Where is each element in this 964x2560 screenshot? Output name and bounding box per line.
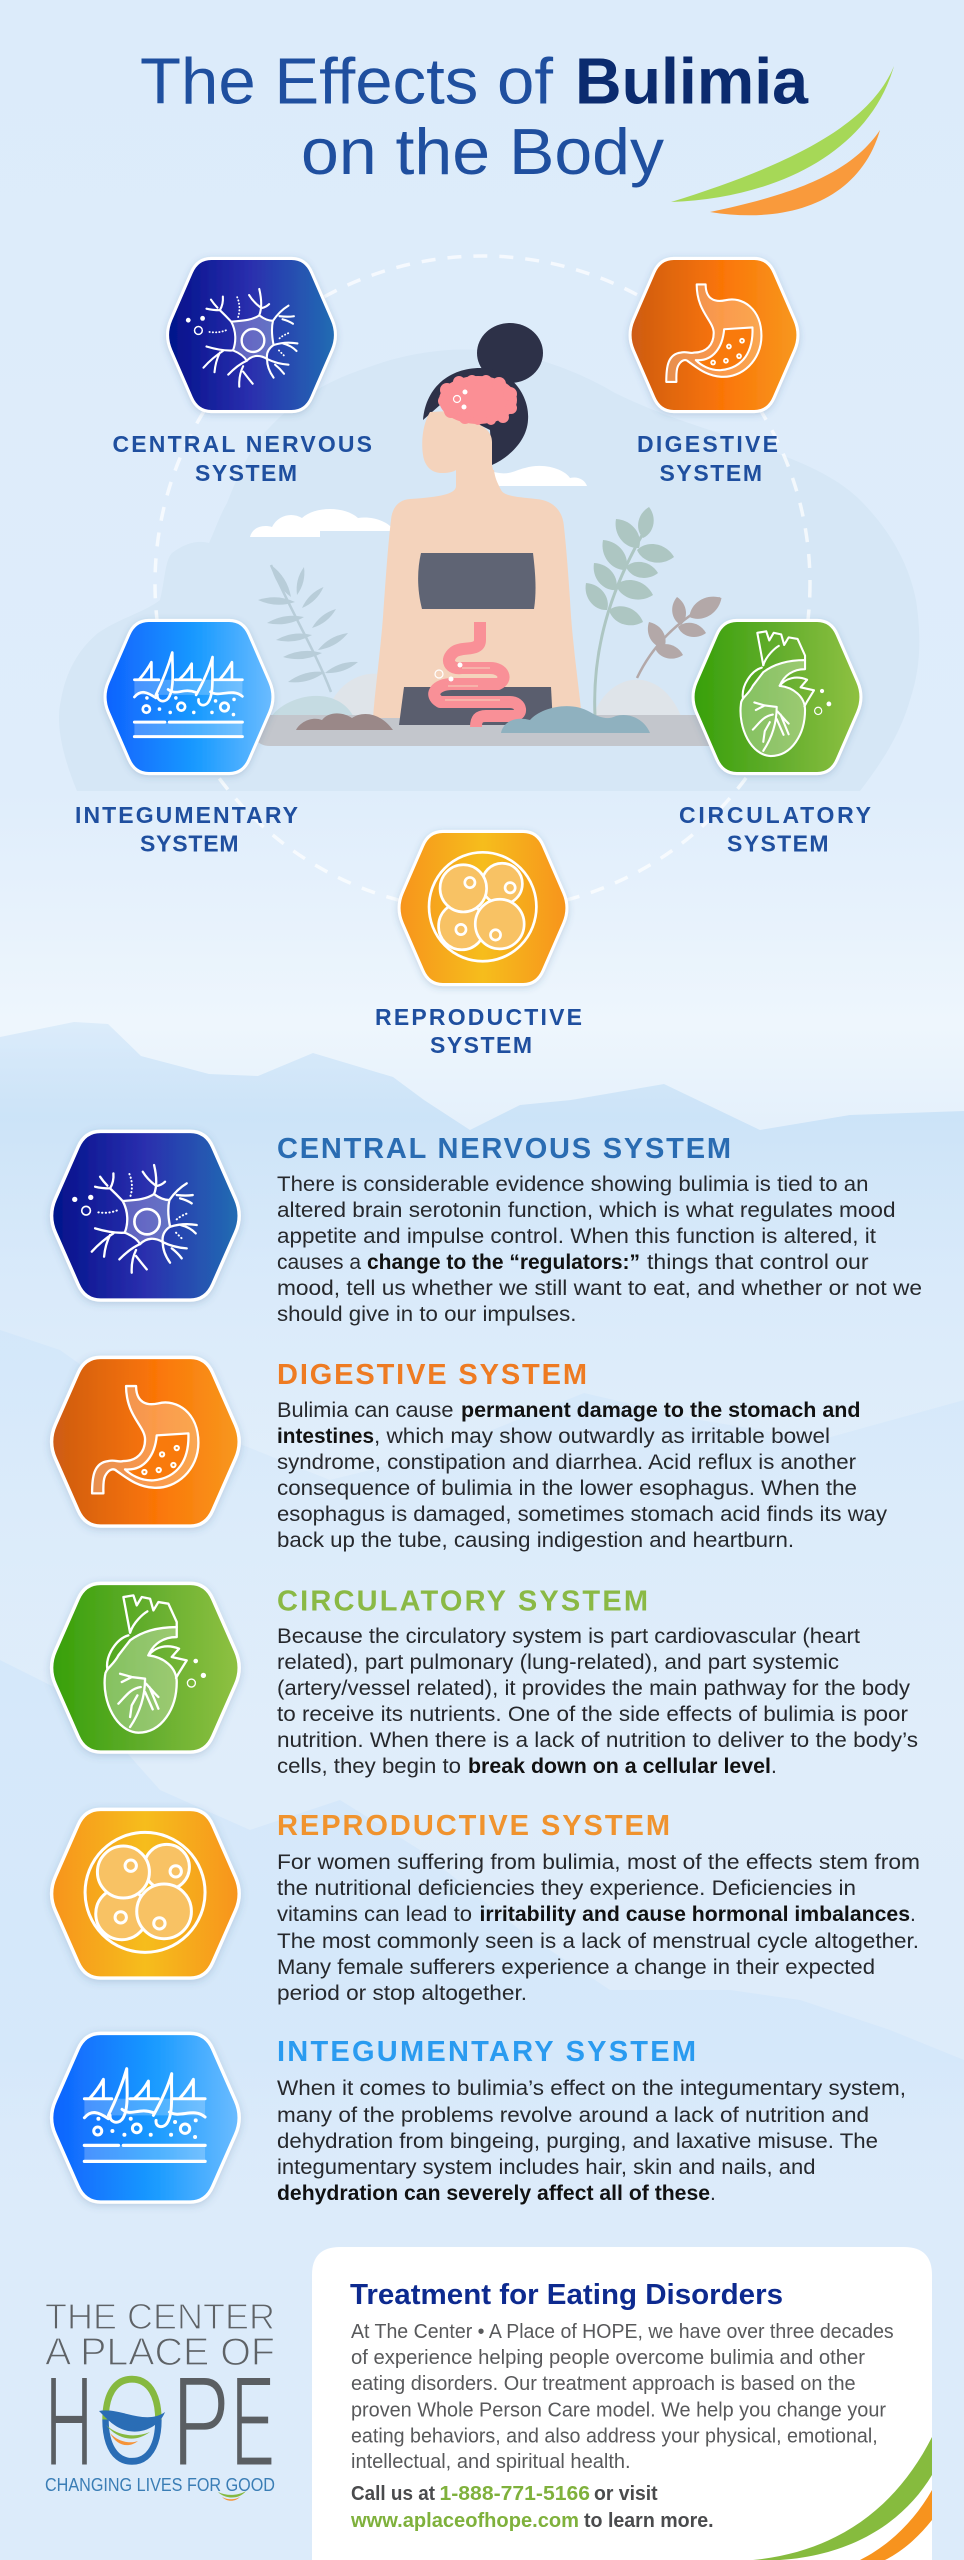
body text: . (710, 2182, 716, 2205)
panel: treatment card (312, 2247, 932, 2560)
panel: reproductive system (52, 1809, 920, 2005)
label: digestive system: DIGESTIVE (637, 431, 778, 457)
heading: CIRCULATORY SYSTEM (277, 1586, 648, 1618)
body text: things that control our (647, 1251, 869, 1274)
icon: digestive hexagon (630, 258, 798, 412)
heading: CENTRAL NERVOUS SYSTEM (277, 1133, 731, 1165)
call to action: www.aplaceofhope.com (350, 2509, 579, 2532)
body text: vitamins can lead to (277, 1903, 472, 1926)
brain (438, 375, 517, 425)
body text: altered brain serotonin function, which is what regulates mood (277, 1199, 896, 1222)
body text: the nutritional deficiencies they experience. Deficiencies in (277, 1877, 856, 1900)
logo: The Center A Place of Hope (45, 2296, 275, 2501)
body text: When it comes to bulimia’s effect on the integumentary system, (277, 2077, 906, 2100)
background hill (59, 350, 919, 791)
body text: cells, they begin to (277, 1755, 461, 1778)
body text: to receive its nutrients. One of the side effects of bulimia is poor (277, 1703, 908, 1726)
body text: should give in to our impulses. (277, 1303, 576, 1326)
hair (423, 368, 528, 465)
body (373, 462, 582, 718)
call to action: Call us at (351, 2482, 435, 2505)
body text: related), part pulmonary (lung-related), and part systemic (277, 1651, 839, 1674)
body text: syndrome, constipation and diarrhea. Acid reflux is another (277, 1451, 856, 1474)
label: integumentary system: SYSTEM (140, 830, 238, 856)
icon: circulatory hexagon (693, 620, 861, 774)
intestines (434, 622, 520, 727)
body text: period or stop altogether. (277, 1982, 527, 2005)
icon: pale left plant (258, 563, 359, 692)
body text: Bulimia can cause (277, 1399, 454, 1422)
icon: heart (52, 1583, 239, 1752)
call to action: or visit (594, 2482, 658, 2505)
heading: INTEGUMENTARY SYSTEM (277, 2036, 696, 2068)
icon: skin (52, 2033, 239, 2202)
icon: green right plant (580, 506, 676, 716)
dashed connection ring (155, 256, 810, 911)
body text: appetite and impulse control. When this function is altered, it (277, 1225, 876, 1248)
card body: of experience helping people overcome bulimia and other (351, 2346, 865, 2369)
logo: The Center A Place of Hope: P (172, 2348, 230, 2494)
body text: mood, tell us whether we still want to eat, and whether or not we (277, 1277, 922, 1300)
foreground rocks (296, 706, 650, 733)
body text: (artery/vessel related), it provides the main pathway for the body (277, 1677, 911, 1700)
card body (351, 2320, 894, 2473)
call to action: to learn more. (584, 2509, 714, 2532)
body text: There is considerable evidence showing bulimia is tied to an (277, 1173, 868, 1196)
body text: dehydration can severely affect all of these (277, 2182, 710, 2205)
body text (277, 2077, 906, 2205)
panel: central nervous system (52, 1131, 922, 1326)
icon: neuron (52, 1131, 239, 1300)
logo: The Center A Place of Hope: THE CENTER (45, 2296, 275, 2337)
panel: circulatory system (52, 1583, 918, 1778)
background mountains (0, 1022, 964, 2230)
panel: integumentary system (52, 2033, 906, 2205)
body text: back up the tube, causing indigestion and heartburn. (277, 1529, 794, 1552)
illustration: background rocks (268, 674, 681, 722)
body text: consequence of bulimia in the lower esophagus. When the (277, 1477, 857, 1500)
title: The Effects of (140, 44, 554, 118)
body text: For women suffering from bulimia, most of the effects stem from (277, 1851, 920, 1874)
card body: proven Whole Person Care model. We help you change your (351, 2398, 886, 2422)
logo: The Center A Place of Hope: H (45, 2348, 93, 2494)
body text: change to the “regulators:” (367, 1251, 640, 1274)
body text: dehydration from bingeing, purging, and laxative misuse. The (277, 2130, 878, 2153)
label: central nervous system (112, 431, 372, 486)
call to action (350, 2482, 714, 2532)
face (422, 410, 501, 490)
icon: cells (52, 1809, 239, 1978)
clouds (250, 466, 587, 537)
body text: . (771, 1755, 777, 1778)
body text: causes a (277, 1251, 361, 1274)
icon: stomach (52, 1357, 239, 1526)
label: circulatory system (679, 802, 871, 856)
body text (277, 1173, 922, 1326)
body text: , which may show outwardly as irritable bowel (374, 1425, 830, 1448)
title swoosh (671, 66, 894, 215)
body text (277, 1399, 888, 1552)
label: circulatory system: CIRCULATORY (679, 802, 871, 828)
label: reproductive system (375, 1004, 582, 1058)
title: on the Body (301, 115, 665, 188)
body text (277, 1625, 918, 1778)
body text: nutrition. When there is a lack of nutrition to deliver to the body’s (277, 1729, 918, 1752)
body text: intestines (277, 1425, 374, 1448)
label: central nervous system: SYSTEM (195, 460, 297, 486)
logo: The Center A Place of Hope: A PLACE OF (45, 2331, 275, 2374)
pants (399, 687, 553, 725)
card body: At The Center • A Place of HOPE, we have over three decades (351, 2320, 894, 2343)
body text: permanent damage to the stomach and (461, 1399, 860, 1422)
top garment (418, 553, 536, 609)
label: reproductive system: SYSTEM (430, 1032, 532, 1058)
body text (277, 1851, 920, 2005)
heading: DIGESTIVE SYSTEM (277, 1359, 587, 1391)
body text: many of the problems revolve around a lack of nutrition and (277, 2104, 869, 2127)
card body: intellectual, and spiritual health. (351, 2450, 631, 2473)
card background (312, 2247, 932, 2560)
body text: The most commonly seen is a lack of menstrual cycle altogether. (277, 1930, 919, 1953)
illustration: woman figure (373, 323, 582, 727)
label: integumentary system: INTEGUMENTARY (75, 802, 298, 828)
title: Bulimia (575, 44, 809, 118)
body text: Many female sufferers experience a change in their expected (277, 1956, 875, 1979)
label: central nervous system: CENTRAL NERVOUS (112, 431, 372, 457)
card heading: Treatment for Eating Disorders (350, 2279, 783, 2311)
body text: break down on a cellular level (468, 1755, 771, 1778)
label: reproductive system: REPRODUCTIVE (375, 1004, 582, 1030)
icon: reproductive hexagon (399, 831, 567, 985)
call to action: 1-888-771-5166 (440, 2482, 590, 2505)
body text: . (910, 1903, 916, 1926)
label: circulatory system: SYSTEM (727, 830, 828, 856)
body text: esophagus is damaged, sometimes stomach acid finds its way (277, 1503, 888, 1526)
label: integumentary system (75, 802, 298, 856)
title (140, 44, 809, 188)
label: digestive system (637, 431, 778, 486)
card swoosh (753, 2437, 932, 2560)
logo: The Center A Place of Hope: CHANGING LIVES FOR GOOD (45, 2475, 275, 2495)
ground (253, 715, 716, 746)
body text: irritability and cause hormonal imbalances (480, 1903, 910, 1926)
icon: integumentary hexagon (105, 620, 273, 774)
label: digestive system: SYSTEM (660, 460, 762, 486)
logo: The Center A Place of Hope: E (231, 2348, 275, 2494)
card body: eating behaviors, and also address your physical, emotional, (351, 2424, 878, 2448)
icon: brown right plant (637, 590, 726, 678)
logo: The Center A Place of Hope: O (97, 2347, 167, 2493)
body text: Because the circulatory system is part cardiovascular (heart (277, 1625, 860, 1648)
card body: eating disorders. Our treatment approach is based on the (351, 2372, 856, 2395)
icon: central nervous hexagon (168, 258, 335, 412)
panel: digestive system (52, 1357, 888, 1552)
body text: integumentary system includes hair, skin and nails, and (277, 2156, 816, 2179)
heading: REPRODUCTIVE SYSTEM (277, 1810, 670, 1842)
hair bun (477, 323, 543, 383)
